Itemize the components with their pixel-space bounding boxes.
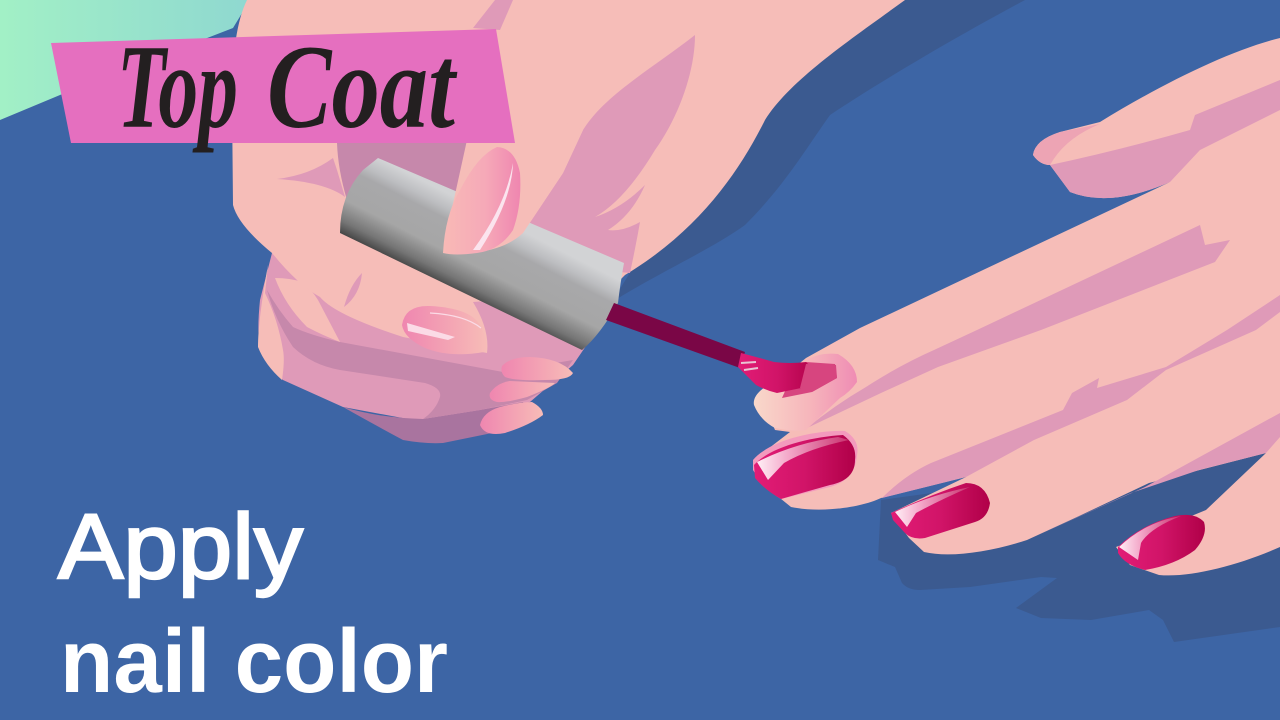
index nail [754,354,857,431]
thumb nail [1033,124,1100,165]
nail: small three [480,402,543,434]
nail: upper finger [443,147,520,254]
middle nail [753,431,858,499]
thumb crease [344,273,362,307]
palm inner lobe [275,278,340,342]
shadow: right hand [878,440,1280,642]
brush stem [606,303,745,368]
heading: Apply [58,496,303,598]
ring nail [891,483,990,538]
left hand [232,0,905,443]
pinky nail [1118,515,1205,570]
brush head [738,353,837,393]
palm [258,253,590,425]
main skin [232,0,905,353]
skin crease [277,158,345,197]
heading [58,496,448,712]
heading: nail color [60,612,448,712]
label: Top Coat: Coat [267,21,457,154]
palm mid shadow [267,290,573,419]
palm deep shadow [343,402,530,443]
finger shadow three [1027,413,1280,540]
label: Top Coat: Top [117,21,238,154]
thumb shadow [1050,80,1280,198]
finger shadow above label [473,0,513,30]
finger shadow one [807,225,1230,428]
grip shadow [337,143,470,205]
mint corner [0,0,250,120]
right hand skin [760,38,1280,575]
bottle cap [340,158,624,350]
nail: small two [490,381,555,402]
finger shadow two [882,295,1280,498]
palm left lobe [258,265,284,380]
right hand [753,38,1280,575]
finger shadow right [523,35,695,273]
finger over cap [445,120,583,253]
shadow: left hand [612,0,1025,302]
nail: small one [501,357,573,380]
nail: thumb [402,306,486,354]
label: Top Coat [51,21,515,154]
